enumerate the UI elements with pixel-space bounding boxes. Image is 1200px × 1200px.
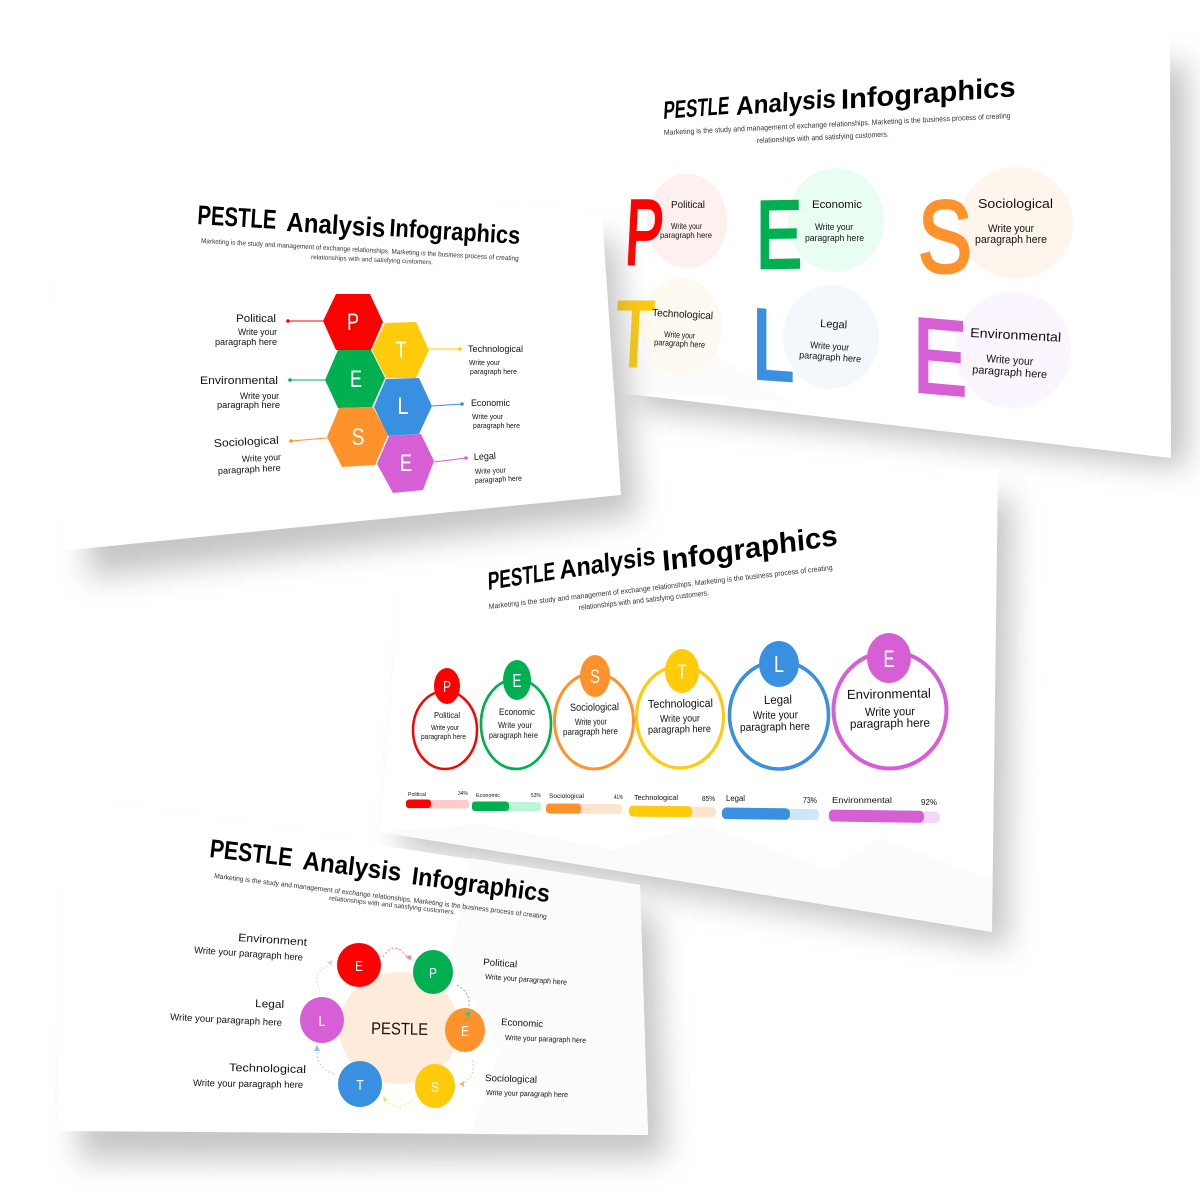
item: Sociological circle: Sociological [570,701,619,714]
label: Environmental 92%: 92% [921,797,937,807]
item: Political: Write your [671,221,702,231]
bar: Economic 53% [472,793,541,811]
label: Technological: Write your [469,358,500,367]
bar: Sociological 41% [546,793,623,814]
label: Sociological [214,435,281,476]
label: Political: Write your paragraph here [485,972,567,987]
item: Economic: E [756,181,802,289]
title: Analysis [559,540,656,585]
hexagon: E purple: E [400,450,412,477]
title: PESTLE [663,92,730,125]
label: Technological 85%: Technological [634,793,678,802]
item: Sociological: Write your [988,223,1034,235]
label: Economic [471,398,520,430]
hexagon: T yellow: T [396,337,407,364]
item: Political: paragraph here [660,230,712,240]
item: Technological: Write your [664,329,696,341]
label: Environmental: paragraph here [217,400,280,410]
item: Political circle [413,668,477,769]
item: Legal circle: paragraph here [740,721,810,734]
item: Sociological circle: paragraph here [563,726,618,737]
label: Legal: paragraph here [475,474,522,485]
node: P green: P [429,965,437,982]
label: Sociological: Sociological [485,1073,537,1086]
item: Legal: paragraph here [799,350,861,365]
title: Infographics [389,214,521,250]
label: Technological 85%: 85% [702,794,715,803]
item: Legal: Write your [810,340,849,354]
title: Infographics [661,520,839,578]
node: E red: E [355,958,363,975]
node: S yellow: S [431,1079,439,1096]
item: Environmental circle: E [884,646,894,673]
item: Sociological: Sociological [978,196,1053,211]
hexagon: T yellow [372,322,429,378]
item: Economic circle: Write your [498,720,532,730]
item: Environmental [913,292,1071,419]
connector: Political [286,319,323,323]
node: L purple [300,997,344,1043]
item: Economic: paragraph here [805,233,864,244]
item: Political circle: paragraph here [421,732,466,741]
subtitle: relationships with and satisfying customers. [311,254,433,266]
item: Economic circle [481,660,551,769]
item: Legal: L [752,288,794,403]
hexagon: S orange [327,407,388,467]
hexagon: E purple [377,434,434,493]
title: Infographics [841,71,1016,115]
label: Economic: Write your [472,412,503,421]
hexagon: L blue [374,378,432,436]
panel: left slide, hexagon stack [57,168,638,578]
item: Legal circle: Legal [764,693,792,707]
title: PESTLE [197,200,277,235]
subtitle: Marketing is the study and management of exchange relationships. Marketing is the business process of creating [664,111,1011,137]
label: Sociological: Write your [242,452,281,464]
item: Economic: Economic [812,199,863,211]
label: Economic [501,1017,586,1045]
label: Legal 73%: 73% [803,796,817,805]
bar: Sociological 41%: 41% [614,795,623,801]
hexagon: P red: P [347,309,359,336]
item: Legal circle: L [774,651,784,677]
item: Environmental: paragraph here [972,364,1047,381]
label: Political: Political [483,957,517,970]
label: Environment: Write your paragraph here [194,945,303,964]
connector: Environmental [288,378,325,382]
node: P green [413,950,453,994]
label: Sociological: paragraph here [218,463,281,476]
item: Technological circle [636,649,724,768]
bar: Economic 53%: 53% [531,793,541,799]
item: Environmental circle: paragraph here [850,716,930,731]
label: Sociological: Write your paragraph here [486,1088,568,1099]
bar: Political 34%: Political [408,792,426,798]
node: L purple: L [318,1013,326,1030]
node: E orange: E [461,1023,469,1040]
arrow: yellow to blue [383,1096,412,1106]
label: Technological: paragraph here [470,367,517,376]
label: Environment [194,932,307,964]
bar: Sociological 41%: Sociological [549,793,585,800]
item: Legal circle: Write your [753,709,798,722]
label: Legal [474,451,522,485]
title [197,200,521,250]
item: Technological circle: Write your [660,713,701,725]
label: Technological 85% [634,793,715,803]
node: S yellow [415,1064,455,1108]
title: PESTLE [208,833,294,872]
item: Environmental: Environmental [970,325,1062,345]
title: PESTLE [488,557,555,596]
item: Legal circle [730,641,828,769]
node: T blue: T [356,1077,364,1094]
label: Economic: Write your paragraph here [505,1033,586,1045]
label: Environmental: Environmental [200,375,278,387]
item: Technological [613,278,722,386]
item: Technological: T [613,282,656,386]
label: Technological: Write your paragraph here [193,1078,303,1091]
label: Environmental 92%: Environmental [832,795,892,805]
title [663,71,1016,125]
node: E orange [445,1008,485,1052]
item: Economic circle: paragraph here [489,730,538,740]
title [488,520,839,596]
item: Environmental: Write your [986,353,1034,368]
item: Political circle: Political [434,710,460,720]
label: Political: paragraph here [215,337,277,347]
item: Political: Political [671,200,705,211]
item: Environmental circle [834,633,946,768]
item: Political circle: P [443,679,451,696]
node: E red [337,943,381,987]
hexagon: S orange: S [352,424,364,451]
connector: Economic [432,402,464,406]
bar: Environmental 92% [829,810,940,823]
title: Analysis [736,83,836,121]
label: Technological: Technological [229,1062,306,1076]
arrow: blue to purple [314,1045,334,1074]
item: Technological: paragraph here [654,337,706,350]
item: Sociological circle: S [590,667,600,688]
label: Environmental 92% [832,795,937,807]
item: Technological circle: paragraph here [648,724,711,736]
arrow: red to green [383,948,411,960]
label: Environment: Environment [238,932,307,949]
bar: Economic 53%: Economic [476,793,500,799]
item: Sociological [918,167,1073,294]
label: Sociological [485,1073,568,1099]
node: T blue [338,1061,382,1107]
item: Environmental: E [913,295,967,419]
item: Political: P [623,181,666,284]
label: Political [483,957,567,987]
label: Technological [468,344,523,376]
label: Environmental: Write your [240,391,279,401]
title: Analysis [301,845,403,887]
item: Political circle: Write your [431,723,459,732]
item: Sociological circle: Write your [575,716,607,727]
arrow: orange to yellow [459,1060,473,1087]
item: Economic circle: Economic [499,707,535,718]
subtitle: relationships with and satisfying customers. [329,895,456,916]
title: Infographics [410,862,552,908]
item: Legal [752,285,879,403]
subtitle: relationships with and satisfying customers. [578,588,709,612]
bar: Technological 85% [629,806,716,817]
label: Legal: Legal [255,998,284,1011]
item: Environmental circle: Write your [865,704,915,719]
item: Economic [756,168,884,289]
label: Legal: Legal [474,451,496,463]
arrow: purple to red [317,960,333,990]
subtitle [664,111,1011,145]
connector: Sociological [289,438,327,443]
subtitle: Marketing is the study and management of exchange relationships. Marketing is the business process of creating [214,873,547,921]
hexagon: L blue: L [398,393,408,420]
connector: Technological [429,347,462,351]
subtitle: Marketing is the study and management of exchange relationships. Marketing is the business process of creating [488,563,833,611]
item: Political [623,174,727,284]
connector: Legal [434,456,468,462]
item: Technological circle: Technological [648,698,713,711]
arrow: green to orange [457,985,471,1018]
label: Environmental [200,375,280,410]
label: Economic: Economic [471,398,510,409]
panel: bottom left slide, PESTLE cycle [57,797,666,1160]
item: Sociological: paragraph here [975,234,1047,246]
label: Legal 73% [726,794,817,805]
label: Sociological: Sociological [214,435,279,450]
subtitle: relationships with and satisfying customers. [757,130,889,145]
bar: Political 34%: 34% [458,791,468,797]
panel: top right slide, six letter circles [572,28,1186,468]
label: Legal [170,998,284,1029]
hexagon: P red [323,294,383,350]
label: Political: Write your [238,327,277,337]
label: Economic: Economic [501,1017,544,1030]
center circle: PESTLE: PESTLE [371,1019,428,1039]
label: Legal: Write your [475,465,507,476]
label: Legal 73%: Legal [726,794,745,803]
label: Political: Political [236,313,276,325]
bar: Legal 73% [722,808,819,820]
item: Sociological circle [554,655,634,769]
title: Analysis [286,207,386,243]
item: Economic: Write your [815,222,853,233]
item: Economic circle: E [512,671,522,691]
item: Sociological: S [918,180,972,294]
center circle: PESTLE [339,972,459,1084]
item: Environmental circle: Environmental [847,686,931,702]
item: Technological circle: T [678,661,687,684]
label: Legal: Write your paragraph here [170,1012,282,1029]
hexagon: E green: E [350,366,362,393]
label: Technological [193,1062,306,1091]
bar: Political 34% [406,791,469,808]
label: Political [215,313,277,347]
title [208,833,552,908]
subtitle: Marketing is the study and management of exchange relationships. Marketing is the business process of creating [201,238,519,263]
item: Legal: Legal [820,318,847,331]
label: Technological: Technological [468,344,523,355]
item: Technological: Technological [652,307,713,322]
hexagon: E green [325,350,385,408]
panel: middle slide, progress circles and bars [380,468,1012,948]
label: Economic: paragraph here [473,421,520,430]
